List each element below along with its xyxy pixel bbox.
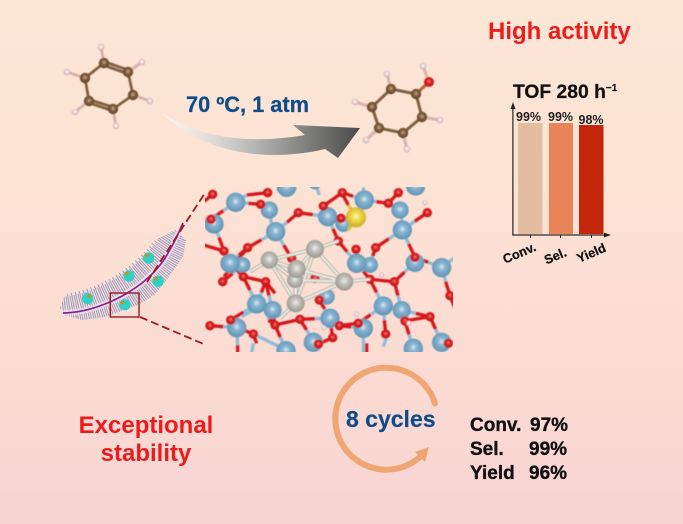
chart title: TOF 280 h <box>513 82 606 103</box>
heading: exceptional stability <box>79 412 213 467</box>
platinum cluster <box>250 240 370 318</box>
value labels: 99% <box>548 110 573 124</box>
bar chart: TOF <box>500 82 618 267</box>
hydrogen atoms <box>321 200 428 330</box>
stability results: 96% <box>529 463 567 484</box>
stability results: 99% <box>529 439 567 460</box>
stability results: Sel. <box>470 439 504 460</box>
chart title: −1 <box>606 83 618 94</box>
reaction conditions: 70 ºC, 1 atm <box>186 92 309 117</box>
oxygen atoms <box>205 188 455 349</box>
stability results: Conv. <box>470 415 521 436</box>
back atoms <box>234 201 411 319</box>
value labels: 99% <box>516 110 541 124</box>
axis labels: Sel. <box>542 245 569 267</box>
feather catalyst <box>60 222 188 321</box>
heading: high activity: High activity <box>488 18 631 45</box>
value labels: 98% <box>578 113 604 127</box>
stability results <box>470 415 568 484</box>
molecule: phenol <box>352 63 443 152</box>
cycle count: 8 cycles <box>346 406 436 432</box>
framework bonds <box>202 183 455 353</box>
value labels <box>516 110 604 127</box>
stability results: Yield <box>470 463 515 484</box>
axis labels <box>500 239 608 267</box>
metal clusters <box>82 252 164 310</box>
zoom box and dashed callout lines <box>110 193 206 345</box>
barbs <box>60 230 186 320</box>
gold dopant atom <box>346 205 366 230</box>
spine <box>63 223 183 313</box>
axis labels: Conv. <box>500 239 538 267</box>
bars <box>518 123 604 234</box>
arrow: reaction <box>162 113 360 158</box>
crystal structure <box>205 187 453 352</box>
heading: exceptional stability: Exceptional <box>79 412 213 439</box>
axis labels: Yield <box>574 240 608 266</box>
molecule: benzene <box>64 44 153 129</box>
silicon atoms <box>205 187 452 352</box>
cycle arrow <box>335 368 435 470</box>
pale shaft glow <box>63 223 183 313</box>
axes <box>511 102 611 238</box>
stability results: 97% <box>530 415 568 436</box>
heading: exceptional stability: stability <box>101 440 192 467</box>
